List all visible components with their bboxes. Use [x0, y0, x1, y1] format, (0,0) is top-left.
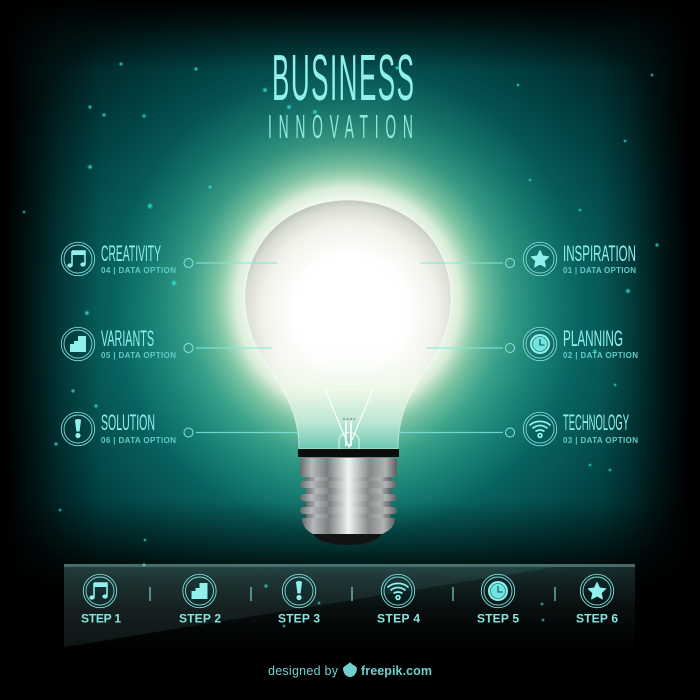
- footer credit: designed by: [268, 664, 339, 678]
- title: INNOVATION: [268, 109, 413, 146]
- left item: variants: [61, 326, 193, 361]
- right item: planning: [506, 326, 638, 361]
- bulb neck shading: [245, 200, 451, 449]
- step 3: [278, 574, 320, 626]
- left item: variants: VARIANTS: [101, 326, 154, 351]
- step 2: STEP 2: [179, 612, 221, 626]
- bulb glass: [245, 200, 451, 449]
- title: BUSINESS: [272, 42, 414, 114]
- title: [268, 42, 414, 146]
- step 5: STEP 5: [477, 612, 519, 626]
- step 4: STEP 4: [377, 612, 420, 626]
- sparkle particles: [22, 62, 660, 628]
- left item: solution: SOLUTION: [101, 410, 155, 435]
- step 6: [576, 574, 618, 626]
- step 6: STEP 6: [576, 612, 618, 626]
- right item: technology: [506, 410, 638, 446]
- left item: creativity: [61, 241, 193, 276]
- step 1: [81, 574, 121, 626]
- right item: planning: PLANNING: [563, 326, 623, 351]
- step 5: [477, 574, 519, 626]
- right item: technology: 03 | DATA OPTION: [563, 436, 638, 445]
- light bulb: [245, 200, 451, 545]
- left item: creativity: 04 | DATA OPTION: [101, 266, 176, 275]
- icon: freepik mascot: [343, 662, 357, 677]
- steps panel: [64, 564, 635, 651]
- step 2: [179, 574, 221, 626]
- filament: [325, 389, 373, 449]
- footer credit: freepik.com: [361, 664, 432, 678]
- connector lines: [196, 263, 503, 432]
- left item: solution: [61, 410, 193, 446]
- footer credit: [268, 662, 432, 678]
- lamp base: [298, 449, 399, 545]
- left item: solution: 06 | DATA OPTION: [101, 436, 176, 445]
- separators: [150, 587, 555, 601]
- right item: planning: 02 | DATA OPTION: [563, 351, 638, 360]
- right item: inspiration: 01 | DATA OPTION: [563, 266, 636, 275]
- step 1: STEP 1: [81, 612, 121, 626]
- step 3: STEP 3: [278, 612, 320, 626]
- right item: inspiration: INSPIRATION: [563, 241, 636, 266]
- left item: variants: 05 | DATA OPTION: [101, 351, 176, 360]
- step 4: [377, 574, 420, 626]
- left item: creativity: CREATIVITY: [101, 241, 161, 266]
- right item: inspiration: [506, 241, 636, 276]
